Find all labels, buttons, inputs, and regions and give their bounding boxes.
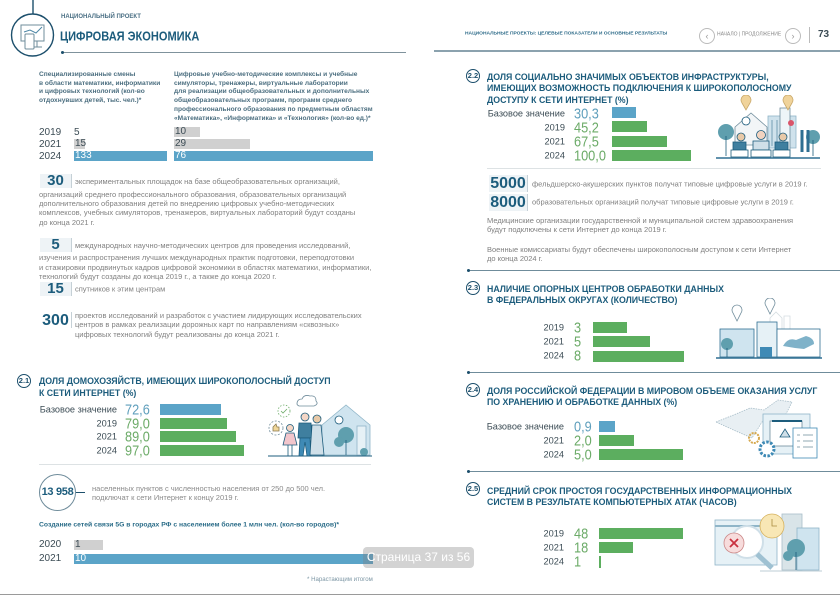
divider	[487, 168, 821, 169]
bar 2021: 10	[75, 552, 86, 564]
badge 2.5: 2.5	[468, 484, 478, 493]
value 2021: 89,0	[125, 428, 150, 446]
value 2024: 100,0	[574, 147, 606, 164]
value 2021: 18	[574, 540, 588, 556]
bar 2024	[599, 556, 600, 568]
bar base	[612, 107, 636, 118]
value 2019: 5	[74, 127, 80, 138]
callout: 15	[40, 280, 165, 297]
callout: 300	[42, 311, 362, 339]
divider with dot	[467, 270, 840, 271]
heading: Создание сетей связи 5G в городах РФ с населением более 1 млн чел. (кол-во городов)*	[39, 522, 339, 529]
text: изучения и распространения лучших международных практик подготовки, переподготовки	[39, 253, 354, 262]
bar 2021	[599, 542, 633, 553]
text	[39, 241, 371, 281]
bar 2019	[592, 322, 626, 333]
years: 2021	[39, 139, 61, 150]
bar 2021	[592, 336, 650, 347]
circle number	[39, 474, 76, 511]
chart heading: в области математики, информатики	[39, 80, 160, 87]
badge 2.3: 2.3	[468, 283, 478, 292]
chart heading	[39, 71, 160, 104]
page number: 73	[818, 29, 829, 40]
text: medical organisations: Медицинские организации государственной и муниципальной систем здравоохранения	[487, 216, 793, 224]
divider	[39, 464, 371, 465]
divider with dot	[467, 372, 840, 373]
text: центров в рамках реализации дорожных карт по направлениям «сквозных»	[75, 320, 339, 329]
value 2019: 3	[574, 320, 581, 336]
text: medical organisations: будут подключены к сети Интернет до конца 2019 г.	[487, 225, 667, 234]
page separator	[809, 27, 810, 43]
bar 2021	[599, 435, 634, 446]
panel 2.3: data centres	[466, 281, 724, 364]
divider with dot	[467, 471, 840, 472]
number: 5	[51, 236, 60, 253]
bar 2021	[74, 554, 373, 564]
row 2024: 2024	[544, 556, 564, 566]
page counter overlay	[363, 547, 474, 568]
row 2021: 2021	[97, 431, 117, 441]
bar base	[160, 404, 221, 415]
bar 2021: 15	[75, 138, 86, 149]
text: military commissariats: Военные комиссариаты будут обеспечены широкополосным доступом к сети Интернет	[487, 244, 791, 254]
value 2021: 5	[574, 334, 581, 350]
footnote: * Нарастающим итогом	[307, 576, 373, 583]
value base: 72,6	[125, 402, 150, 418]
value base: 0,9	[574, 418, 592, 436]
text: цифровых технологий будут реализованы до конца 2021 г.	[75, 330, 279, 339]
text: технологий будут созданы до конца 2019 г., а также до конца 2020 г.	[39, 272, 276, 281]
chart heading: Специализированные смены	[39, 71, 135, 78]
icon: previous	[699, 28, 715, 44]
number: 5000	[490, 175, 526, 192]
chart: 5G networks	[39, 522, 373, 564]
circle number: 13 958	[42, 486, 73, 498]
badge 2.4	[466, 383, 480, 397]
bar 2020	[74, 540, 103, 550]
heading: СРЕДНИЙ СРОК ПРОСТОЯ ГОСУДАРСТВЕННЫХ ИНФОРМАЦИОННЫХ	[487, 484, 792, 496]
row 2021: 2021	[544, 542, 564, 552]
row 2021: 2021	[545, 136, 565, 146]
row 2024: 2024	[544, 449, 564, 459]
bar 2019	[612, 121, 647, 132]
heading: В ФЕДЕРАЛЬНЫХ ОКРУГАХ (КОЛИЧЕСТВО)	[487, 294, 677, 305]
badge 2.2: 2.2	[468, 71, 478, 80]
bar 2019: 10	[175, 126, 186, 137]
number: 30	[47, 172, 64, 189]
row base: Базовое значение	[487, 421, 564, 431]
years	[39, 127, 61, 162]
connector	[76, 492, 85, 493]
text: образовательных организаций получат типовые цифровые услуги в 2019 г.	[532, 197, 794, 206]
illustration: magnifier and attack	[714, 514, 822, 572]
text: фельдшерско-акушерских пунктов получат типовые цифровые услуги в 2019 г.	[532, 179, 808, 188]
icon: previous: ‹	[706, 31, 708, 41]
value 2024: 97,0	[125, 442, 150, 459]
running title: НАЦИОНАЛЬНЫЕ ПРОЕКТЫ: ЦЕЛЕВЫЕ ПОКАЗАТЕЛИ И ОСНОВНЫЕ РЕЗУЛЬТАТЫ	[465, 32, 667, 37]
text: и стажировки продвинутых кадров цифровой экономики в областях математики, информатики,	[39, 263, 371, 272]
chart: digital learning complexes	[174, 71, 373, 161]
value 2019: 48	[574, 526, 588, 542]
row base: Базовое значение	[488, 108, 565, 118]
callout: 8000	[489, 194, 794, 211]
illustration: family and house	[268, 395, 372, 456]
chart heading: профессионального образования по предметным областям	[174, 106, 373, 113]
heading: СИСТЕМ В РЕЗУЛЬТАТЕ КОМПЬЮТЕРНЫХ АТАК (ЧАСОВ)	[487, 496, 737, 507]
chart heading: общеобразовательных программ, программ среднего	[174, 97, 352, 104]
header: left page	[10, 0, 406, 57]
illustration: map and gears	[716, 400, 818, 458]
bar 2021	[160, 431, 236, 442]
callout: 13 958	[39, 474, 325, 511]
text: спутников к этим центрам	[75, 284, 165, 293]
row 2024: 2024	[545, 150, 565, 160]
chart heading: «Математика», «Информатика» и «Технология» (кол-во ед.)*	[174, 115, 371, 122]
text	[92, 484, 325, 502]
icon: next: ›	[792, 31, 794, 41]
year 2020: 2020	[39, 539, 61, 550]
value 2019: 45,2	[574, 119, 599, 136]
bar 2019	[599, 528, 683, 539]
bar 2021	[174, 139, 250, 149]
bottom rule	[0, 594, 840, 595]
value 2024: 1	[574, 554, 581, 570]
heading	[39, 375, 331, 398]
callout: 5000	[489, 175, 808, 192]
header: right page	[434, 27, 840, 52]
chart heading: симуляторы, тренажеры, виртуальные лаборатории	[174, 80, 348, 87]
bar 2020: 1	[75, 539, 81, 550]
row 2021: 2021	[544, 336, 564, 346]
text: до конца 2021 г.	[39, 218, 95, 227]
row 2021: 2021	[544, 435, 564, 445]
text	[39, 177, 355, 227]
badge 2.1: 2.1	[19, 376, 29, 385]
bar base	[599, 421, 615, 432]
bar 2024	[74, 151, 167, 161]
panel 2.2: social objects	[466, 69, 792, 164]
text	[75, 311, 362, 339]
value 2021: 2,0	[574, 432, 592, 450]
text: military commissariats	[487, 244, 792, 263]
text: международных научно-методических центров для проведения исследований,	[75, 241, 350, 250]
bar 2024	[174, 151, 373, 161]
bar 2024	[160, 445, 244, 456]
header rule	[434, 50, 840, 52]
heading: НАЛИЧИЕ ОПОРНЫХ ЦЕНТРОВ ОБРАБОТКИ ДАННЫХ	[487, 282, 724, 294]
text: экспериментальных площадок на базе общеобразовательных организаций,	[75, 177, 340, 186]
years: 2024	[39, 151, 61, 162]
panel 2.5: downtime	[466, 482, 792, 570]
text: населенных пунктов с численностью населения от 250 до 500 чел.	[92, 484, 325, 492]
icon: next	[785, 28, 801, 44]
value 2024: 5,0	[574, 446, 592, 464]
text: организаций среднего профессионального образования, образовательных организаций	[39, 190, 346, 199]
heading: ДОЛЯ СОЦИАЛЬНО ЗНАЧИМЫХ ОБЪЕКТОВ ИНФРАСТРУКТУРЫ,	[487, 70, 769, 82]
value base: 30,3	[574, 105, 599, 122]
bar 2019	[160, 418, 227, 428]
row 2019: 2019	[544, 528, 564, 538]
callout: 30	[39, 172, 355, 227]
chart heading: и цифровых технологий (кол-во	[39, 88, 145, 95]
project label: НАЦИОНАЛЬНЫЙ ПРОЕКТ	[61, 14, 141, 20]
header rule	[61, 52, 406, 53]
bar 2024: 76	[175, 150, 186, 161]
navigation label: НАЧАЛО | ПРОДОЛЖЕНИЕ	[717, 32, 781, 38]
heading: ИМЕЮЩИХ ВОЗМОЖНОСТЬ ПОДКЛЮЧЕНИЯ К ШИРОКОПОЛОСНОМУ	[487, 82, 791, 93]
year 2021: 2021	[39, 553, 61, 564]
badge 2.4: 2.4	[468, 385, 478, 394]
bar 2024	[612, 150, 691, 161]
number: 300	[42, 312, 69, 329]
number: 8000	[490, 194, 526, 211]
heading: ДОЛЯ РОССИЙСКОЙ ФЕДЕРАЦИИ В МИРОВОМ ОБЪЕМЕ ОКАЗАНИЯ УСЛУГ	[487, 384, 817, 396]
badge 2.2	[466, 69, 480, 83]
chart heading: для реализации общеобразовательных и дополнительных	[174, 88, 369, 95]
number: 15	[47, 280, 64, 297]
number	[40, 282, 72, 296]
text: medical organisations	[487, 216, 793, 234]
text: military commissariats: до конца 2024 г.	[487, 254, 543, 263]
heading	[487, 384, 818, 407]
value 2024: 8	[574, 348, 581, 364]
number	[40, 174, 72, 188]
badge 2.1	[17, 374, 31, 388]
years: 2019	[39, 127, 61, 138]
badge 2.5	[466, 482, 480, 496]
bar 2024	[592, 351, 684, 362]
bar 2021: 29	[175, 138, 186, 149]
callout: 5	[39, 236, 371, 281]
text: дополнительного образования детей по внедрению цифровых учебно-методических	[39, 199, 334, 208]
panel 2.1: households	[17, 374, 331, 459]
text: комплексов, учебных симуляторов, тренажеров, виртуальных лабораторий будут созданы	[39, 208, 355, 217]
bar 2019	[174, 127, 200, 137]
badge 2.3	[466, 281, 480, 295]
bar 2024: 133	[75, 150, 92, 161]
value 2021: 67,5	[574, 133, 599, 150]
chart: specialised shifts	[39, 71, 167, 162]
text: проектов исследований и разработок с участием лидирующих исследовательских	[75, 311, 362, 320]
chart heading: Цифровые учебно-методические комплексы и учебные	[174, 71, 357, 78]
illustration: data centre and map	[716, 298, 822, 359]
text: подключат к сети Интернет к концу 2019 г.	[92, 493, 238, 502]
heading: К СЕТИ ИНТЕРНЕТ (%)	[39, 387, 136, 398]
row base: Базовое значение	[40, 404, 117, 414]
heading: ДОЛЯ ДОМОХОЗЯЙСТВ, ИМЕЮЩИХ ШИРОКОПОЛОСНЫЙ ДОСТУП	[39, 375, 331, 386]
value 2019: 79,0	[125, 415, 150, 432]
heading: ДОСТУПУ К СЕТИ ИНТЕРНЕТ (%)	[487, 94, 629, 105]
row 2019: 2019	[545, 122, 565, 132]
chart heading: отдохнувших детей, тыс. чел.)*	[39, 97, 141, 104]
row 2019: 2019	[544, 322, 564, 332]
row 2024: 2024	[544, 350, 564, 360]
heading	[487, 282, 724, 305]
heading	[487, 70, 792, 105]
heading	[487, 484, 792, 507]
row 2024: 2024	[97, 445, 117, 455]
illustration: school and hospital	[716, 95, 820, 159]
panel 2.4: global share	[466, 383, 818, 464]
bar 2024	[599, 449, 683, 460]
bar 2021	[612, 136, 667, 146]
page counter overlay: Страница 37 из 56	[367, 550, 470, 564]
title: ЦИФРОВАЯ ЭКОНОМИКА	[60, 28, 199, 44]
number	[40, 238, 72, 252]
chart heading	[174, 71, 373, 122]
icon: digital economy emblem	[10, 0, 54, 57]
heading: ПО ХРАНЕНИЮ И ОБРАБОТКЕ ДАННЫХ (%)	[487, 396, 677, 407]
row 2019: 2019	[97, 418, 117, 428]
